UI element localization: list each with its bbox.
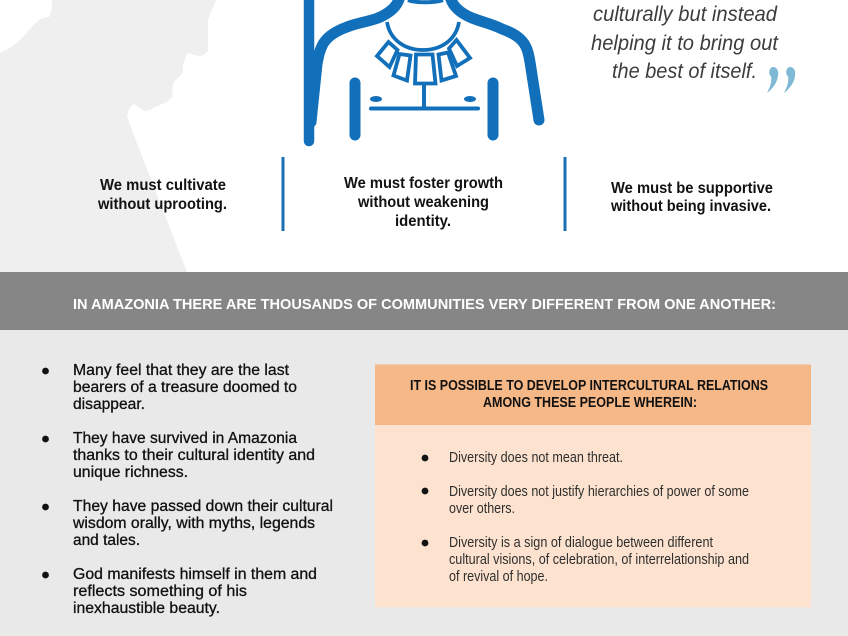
statement: cultivate: We must cultivate xyxy=(100,177,226,194)
statement: foster growth xyxy=(344,175,503,230)
bullet list: communities: Many feel that they are the last xyxy=(73,362,290,379)
bullet list: communities xyxy=(42,362,333,617)
diversity list xyxy=(422,450,749,585)
banner: IN AMAZONIA THERE ARE THOUSANDS OF COMMUNITIES VERY DIFFERENT FROM ONE ANOTHER: xyxy=(73,296,776,313)
panel header: AMONG THESE PEOPLE WHEREIN: xyxy=(483,395,697,411)
quote text: the best of itself. xyxy=(612,59,757,83)
diversity list: cultural visions, of celebration, of interrelationship and xyxy=(449,552,749,568)
grey head silhouette xyxy=(0,0,216,272)
quote text: culturally but instead xyxy=(593,2,778,26)
bullet list: communities: wisdom orally, with myths, legends xyxy=(72,515,315,532)
bullet list: communities: unique richness. xyxy=(73,464,188,481)
necklace beads xyxy=(377,40,470,84)
divider: left xyxy=(282,157,284,231)
statement: foster growth: We must foster growth xyxy=(344,175,503,192)
diversity list: Diversity does not justify hierarchies of power of some xyxy=(449,484,749,500)
panel body xyxy=(375,425,811,608)
bullet list: communities: They have survived in Amazonia xyxy=(73,430,297,447)
panel header xyxy=(375,364,811,425)
statement: supportive: We must be supportive xyxy=(611,180,773,197)
bullet list: communities: inexhaustible beauty. xyxy=(73,600,220,617)
diversity list: over others. xyxy=(449,501,515,517)
bullet list: communities: reflects something of his xyxy=(73,583,247,600)
statement: cultivate xyxy=(97,177,227,213)
banner xyxy=(0,272,848,330)
quote text xyxy=(591,2,779,83)
quote text: helping it to bring out xyxy=(591,31,779,55)
icon: closing quotation marks xyxy=(767,67,795,93)
diversity list: Diversity does not mean threat. xyxy=(449,450,623,466)
icon: figure with necklace xyxy=(309,0,539,141)
panel header: IT IS POSSIBLE TO DEVELOP INTERCULTURAL RELATIONS xyxy=(410,378,768,394)
statement: foster growth: without weakening xyxy=(357,194,489,211)
statement: supportive: without being invasive. xyxy=(610,198,771,215)
statement: supportive xyxy=(610,180,773,215)
bullet list: communities: and tales. xyxy=(73,532,140,549)
bullet list: communities: God manifests himself in them and xyxy=(73,566,317,583)
lower background panel xyxy=(0,330,848,636)
diversity list: of revival of hope. xyxy=(449,569,548,585)
divider: right xyxy=(564,157,566,231)
statement: cultivate: without uprooting. xyxy=(97,196,227,213)
panel: intercultural relations xyxy=(375,364,811,608)
bullet list: communities: disappear. xyxy=(73,396,145,413)
bullet list: communities: They have passed down their cultural xyxy=(73,498,333,515)
diversity list: Diversity is a sign of dialogue between different xyxy=(449,535,713,551)
statement: foster growth: identity. xyxy=(395,213,451,230)
bullet list: communities: bearers of a treasure doomed to xyxy=(73,379,297,396)
bullet list: communities: thanks to their cultural identity and xyxy=(73,447,315,464)
